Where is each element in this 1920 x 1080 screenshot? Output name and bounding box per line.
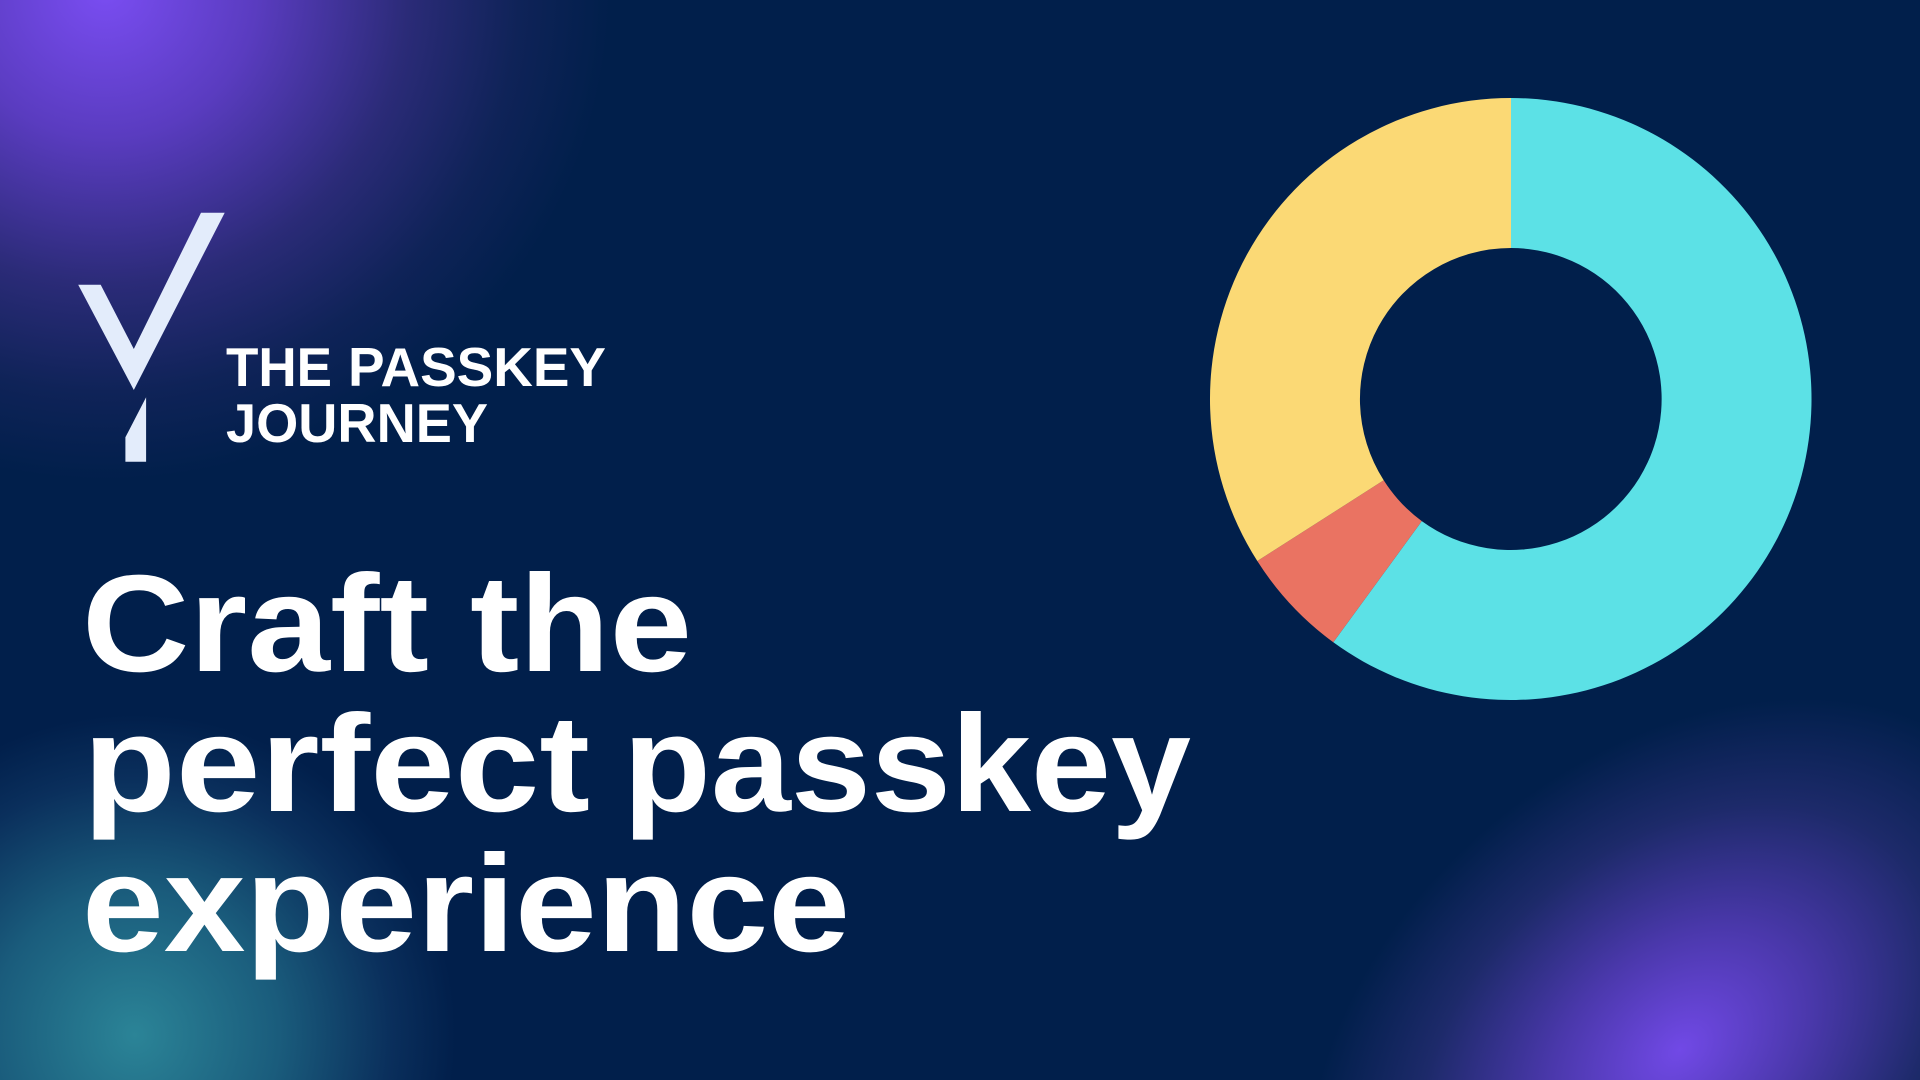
brand name: The Passkey Journey: PASSKEY: [348, 336, 606, 398]
donut chart: [1210, 98, 1812, 700]
title: perfect: [83, 687, 590, 841]
title: Craft: [82, 547, 429, 701]
brand name: The Passkey Journey: JOURNEY: [226, 392, 488, 454]
donut segment: coral: [1257, 480, 1422, 642]
title: experience: [82, 827, 850, 981]
title: [82, 547, 1191, 981]
brand name: The Passkey Journey: THE: [226, 336, 332, 398]
brand name: The Passkey Journey: [226, 336, 606, 454]
donut segment: cyan: [1333, 98, 1812, 700]
title: passkey: [623, 687, 1191, 841]
donut segment: yellow: [1210, 98, 1511, 561]
icon: passkey journey logo mark: [78, 213, 225, 462]
title: the: [470, 547, 692, 701]
